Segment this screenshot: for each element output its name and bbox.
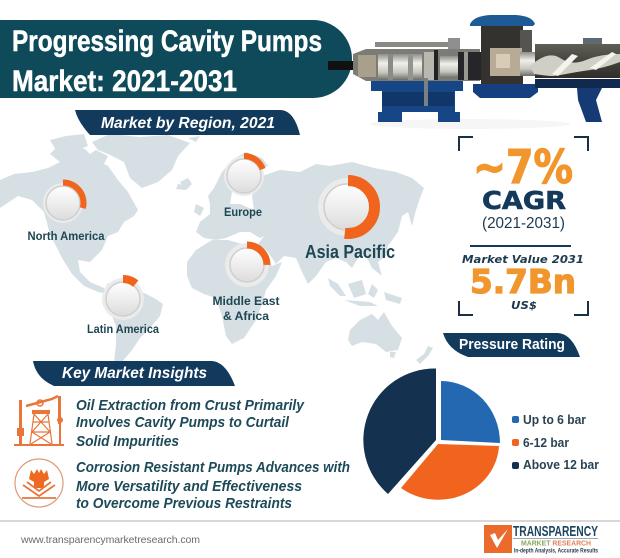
- donut: Latin America: [102, 278, 144, 320]
- insight text: corrosion resistant: More Versatility and Effectiveness: [76, 478, 302, 495]
- title text: Market: 2021-2031: [12, 65, 237, 98]
- label: Middle East & Africa: Middle East: [212, 294, 280, 308]
- legend: pressure rating: Up to 6 bar: [523, 413, 586, 427]
- CAGR label: CAGR: [482, 186, 566, 215]
- legend: pressure rating: 6-12 bar: [523, 436, 569, 450]
- panel: CAGR and market value: [459, 137, 588, 315]
- label: Asia Pacific: Asia Pacific: [305, 242, 395, 262]
- donut: North America: [42, 182, 84, 224]
- label: Latin America: Latin America: [87, 322, 159, 336]
- market value number: 5.7Bn: [470, 262, 576, 301]
- title text: Progressing Cavity Pumps: [12, 25, 322, 58]
- CAGR value: ~7%: [473, 140, 573, 194]
- label: Europe: Europe: [224, 205, 262, 219]
- title banner: [0, 20, 352, 98]
- heading: market by region: [75, 110, 300, 135]
- icon: oil derrick: [14, 396, 64, 446]
- logo subtitle: MARKET RESEARCH: [521, 538, 591, 548]
- label: Middle East & Africa: & Africa: [223, 309, 269, 323]
- frame brackets: [459, 137, 588, 315]
- website url: www.transparencymarketresearch.com: [20, 534, 200, 546]
- insight text: oil extraction: Involves Cavity Pumps to Curtail: [76, 414, 290, 431]
- heading: pressure rating: Pressure Rating: [459, 336, 565, 353]
- logo mark: [484, 525, 512, 553]
- market value label: Market Value 2031: [462, 253, 584, 266]
- logo: [484, 523, 598, 554]
- insight text: corrosion resistant: [76, 459, 350, 512]
- insight text: oil extraction: Oil Extraction from Crust Primarily: [76, 397, 305, 414]
- legend: pressure rating: Above 12 bar: [523, 458, 599, 472]
- pie chart: pressure rating: [363, 368, 500, 500]
- label: North America: North America: [28, 229, 105, 243]
- donut: Asia Pacific: [318, 178, 376, 236]
- icon: corrosion resistance: [15, 459, 63, 507]
- heading: key market insights: Key Market Insights: [62, 365, 207, 382]
- donut: Middle East & Africa: [225, 243, 269, 287]
- heading: key market insights: [33, 361, 235, 386]
- CAGR period: (2021-2031): [482, 215, 565, 232]
- legend: pressure rating: [512, 413, 599, 472]
- heading: market by region: Market by Region, 2021: [101, 115, 275, 132]
- insight text: corrosion resistant: Corrosion Resistant Pumps Advances with: [76, 459, 350, 476]
- world map: [0, 134, 433, 364]
- insight text: oil extraction: Solid Impurities: [76, 433, 179, 450]
- insight text: corrosion resistant: to Overcome Previous Restraints: [76, 495, 292, 512]
- market value unit: US$: [511, 299, 537, 312]
- insight text: oil extraction: [76, 397, 305, 450]
- donut: Europe: [224, 156, 264, 196]
- heading: pressure rating: [443, 333, 580, 357]
- icon: pump illustration: [328, 15, 620, 129]
